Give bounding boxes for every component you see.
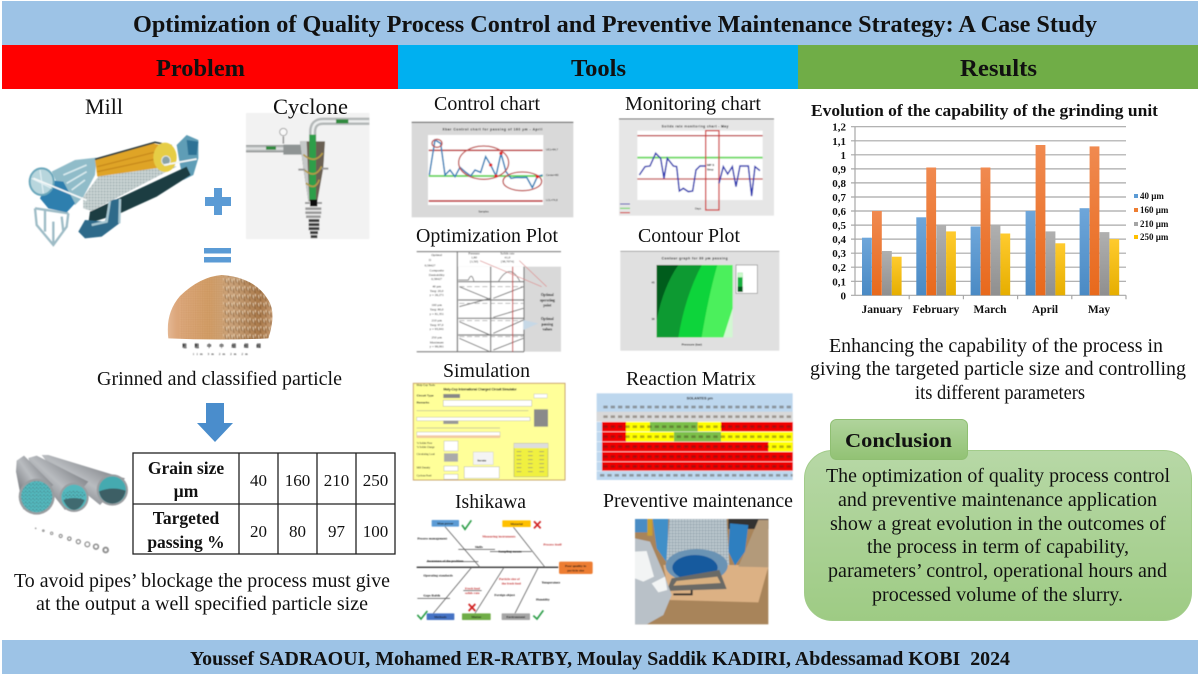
chart: ishikawa diagram: the fresh feed: [502, 581, 521, 585]
chart: optimization plot: Targ: 20,0: [430, 289, 444, 294]
chart: control chart: [412, 122, 573, 217]
x axis labels: May: [1088, 304, 1110, 316]
heading: control chart: Control chart: [434, 93, 540, 115]
text: problem statement: at the output a well specified particle size: [36, 593, 368, 615]
image: classified particles: [163, 273, 277, 356]
chart: optimization plot: [38,7074]: [501, 259, 514, 264]
table: grain size and targeted passing: µm: [174, 481, 199, 501]
table: grain size and targeted passing: Targeted: [153, 508, 219, 528]
table: grain size and targeted passing: 97: [328, 522, 346, 541]
bars: March: [971, 168, 1010, 295]
chart: ishikawa diagram: Process management: [417, 536, 448, 540]
image: simulation screenshot: Moly-Cop Tools: [417, 383, 436, 387]
legend: [1134, 191, 1169, 242]
heading: contour plot: Contour Plot: [638, 225, 740, 247]
bars: February: [916, 168, 956, 295]
y axis labels: [832, 122, 846, 302]
image: preventive maintenance photo: [635, 519, 768, 624]
chart: contour plot: Pressure (bar): [682, 342, 702, 346]
heading: Tools: Tools: [571, 56, 626, 82]
x axis labels: April: [1032, 304, 1058, 316]
chart: optimization plot: 41,0: [504, 255, 511, 260]
chart: optimization plot: 210 µm: [431, 319, 442, 323]
chart: monitoring chart: [619, 119, 774, 216]
legend: 40 µm: [1140, 191, 1164, 201]
chart: optimization plot: Targ: 97,0: [430, 323, 444, 328]
bars: May: [1080, 146, 1119, 295]
table: reaction matrix: SOLANTES µm: [687, 396, 714, 400]
y axis labels: 0,2: [832, 262, 846, 274]
table: grain size and targeted passing: 160: [285, 471, 310, 490]
chart: monitoring chart: MP S: [707, 163, 714, 167]
chart: ishikawa diagram: Matter: [471, 615, 482, 619]
chart: control chart: UCL=84,7: [546, 147, 559, 151]
chart: ishikawa diagram: Gaps Rabik: [423, 594, 440, 598]
chart: contour plot: 45: [651, 280, 655, 284]
image: classified particles: 11m 3m 2m 2m 2m: [193, 352, 248, 356]
chart: monitoring chart: Solids rate monitoring chart - May: [662, 124, 728, 128]
footer: authors: [2, 640, 1198, 674]
bars: April: [1026, 145, 1065, 295]
chart: optimization plot: y = 26,271: [429, 293, 444, 298]
heading: Tools: [398, 45, 798, 89]
table: grain size and targeted passing: 100: [363, 522, 388, 541]
icon: mill: [30, 135, 198, 245]
table: grain size and targeted passing: 210: [324, 471, 349, 490]
bars: January: [862, 211, 902, 295]
chart: optimization plot: Pressure: [468, 251, 480, 255]
image: classified particles: 粗 粗 中 中 细 细 细: [182, 342, 261, 349]
chart: capability bar chart: [811, 101, 1169, 316]
chart: monitoring chart: Stop: [707, 168, 714, 172]
heading: Problem: [2, 45, 398, 89]
text: problem statement: To avoid pipes’ blockage the process must give: [14, 570, 390, 592]
chart: ishikawa diagram: Temperature: [542, 580, 561, 584]
y axis labels: 0,7: [832, 192, 846, 204]
y axis labels: 0,5: [832, 220, 846, 232]
heading: reaction matrix: Reaction Matrix: [626, 368, 756, 390]
gridlines and axes: [851, 127, 1126, 299]
x axis labels: [862, 304, 1110, 316]
icon: equals sign: [204, 248, 231, 262]
chart: optimization plot: operating: [540, 298, 555, 302]
y axis labels: 1,1: [832, 136, 846, 148]
chart: optimization plot: Maximum: [430, 340, 444, 344]
image: simulation screenshot: Circuit Type: [417, 394, 434, 398]
heading: simulation: Simulation: [443, 360, 530, 382]
table: grain size and targeted passing: 250: [363, 471, 388, 490]
text: enhancing the capability: its different parameters: [915, 383, 1085, 404]
chart: optimization plot: y = 81,351: [429, 312, 444, 317]
chart: optimization plot: 0,58427: [431, 277, 442, 282]
chart: control chart: Samples: [478, 210, 489, 214]
table: grain size and targeted passing: 40: [250, 471, 267, 490]
chart: ishikawa diagram: solids rate: [465, 591, 480, 595]
table: grain size and targeted passing: [133, 453, 395, 554]
conclusion text: the process in term of capability,: [867, 537, 1129, 558]
chart: control chart: LCL=74,8: [546, 198, 558, 202]
heading: monitoring chart: Monitoring chart: [625, 93, 761, 115]
conclusion text: [826, 466, 1171, 606]
chart: optimization plot: Optimal: [431, 253, 442, 257]
chart: ishikawa diagram: Fresh feed: [465, 586, 480, 590]
x axis labels: January: [862, 304, 903, 316]
chart: optimization plot: y = 93,941: [429, 327, 444, 332]
y axis labels: 0,3: [832, 248, 846, 260]
chart title: Evolution of the capability of the grinding unit: [811, 101, 1159, 120]
y axis labels: 0,9: [832, 164, 846, 176]
panel: results: [804, 101, 1192, 620]
arrow: down: [197, 403, 233, 442]
chart: contour plot: Contour graph for 80 µm passing: [662, 257, 728, 261]
conclusion text: The optimization of quality process control: [826, 466, 1171, 487]
image: simulation screenshot: Circulating Load: [417, 453, 435, 456]
conclusion text: show a great evolution in the outcomes of: [830, 514, 1167, 535]
y axis labels: 0,8: [832, 178, 846, 190]
text: enhancing the capability: giving the targeted particle size and controlling: [810, 359, 1186, 380]
y axis labels: 0,4: [832, 234, 846, 246]
heading: ishikawa: Ishikawa: [455, 491, 526, 513]
image: simulation screenshot: Cyclone Feed: [417, 475, 432, 478]
icon: cyclone: [246, 113, 369, 239]
chart: optimization plot: Targ: 80,0: [430, 308, 444, 313]
chart: monitoring chart: Days: [695, 206, 702, 210]
icon: pipes: [16, 455, 128, 552]
table: reaction matrix: [597, 393, 793, 480]
image: simulation screenshot: Iterate: [477, 458, 487, 462]
text: enhancing the capability: [810, 336, 1186, 404]
y axis labels: 1,2: [832, 122, 846, 134]
chart: ishikawa diagram: Particle size of: [499, 577, 521, 581]
heading: Results: [798, 45, 1198, 89]
heading: Results: Results: [960, 56, 1037, 82]
text: enhancing the capability: Enhancing the capability of the process in: [829, 336, 1163, 357]
chart: ishikawa diagram: Man power: [437, 522, 454, 526]
legend: 210 µm: [1140, 219, 1169, 229]
table: grain size and targeted passing: 20: [250, 522, 267, 541]
chart: control chart: Center=80: [546, 173, 559, 177]
chart: ishikawa diagram: Measuring instruments: [482, 534, 516, 538]
chart: ishikawa diagram: Operating standards: [423, 574, 454, 578]
chart: control chart: Xbar Control chart for passing of 160 µm - April: [442, 127, 542, 131]
image: simulation screenshot: Mill Density: [417, 466, 431, 469]
caption: grinned and classified particle: Grinned and classified particle: [97, 368, 342, 390]
chart: optimization plot: 0,58427: [425, 264, 436, 269]
y axis labels: 0: [840, 290, 846, 302]
title banner: [2, 1, 1198, 45]
table: grain size and targeted passing: 80: [289, 522, 306, 541]
callout: conclusion: [804, 420, 1192, 620]
chart: ishikawa diagram: Environment: [506, 615, 526, 619]
panel: problem: [14, 94, 395, 615]
text: problem statement: [14, 570, 390, 615]
footer: authors: Youssef SADRAOUI, Mohamed ER-RATBY, Moulay Saddik KADIRI, Abdessamad KOBI 2024: [190, 649, 1010, 670]
x axis labels: February: [913, 304, 960, 316]
chart: optimization plot: Optimal: [541, 317, 554, 321]
heading: preventive maintenance: Preventive maintenance: [603, 490, 793, 512]
chart: optimization plot: [417, 251, 561, 352]
chart: ishikawa diagram: Humidity: [536, 598, 550, 602]
conclusion text: processed volume of the slurry.: [872, 585, 1123, 606]
chart: optimization plot: 40 µm: [432, 284, 441, 288]
chart: ishikawa diagram: Methods: [434, 615, 447, 619]
chart: optimization plot: y = 99,061: [429, 344, 444, 349]
heading: Problem: Problem: [156, 56, 245, 82]
conclusion text: parameters’ control, operational hours and: [828, 561, 1167, 582]
chart: optimization plot: 1,80: [471, 255, 477, 260]
chart: ishikawa diagram: Awareness of the problem: [427, 559, 464, 563]
chart: ishikawa diagram: Foreign object: [494, 593, 516, 597]
label: Cyclone: Cyclone: [273, 94, 348, 119]
image: simulation screenshot: Moly-Cop International Charged Circuit Simulator: [443, 388, 517, 392]
legend: 250 µm: [1140, 232, 1169, 242]
heading: optimization plot: Optimization Plot: [416, 225, 558, 247]
chart: optimization plot: Optimal: [541, 293, 554, 297]
chart: ishikawa diagram: Poor quality in: [565, 564, 586, 568]
table: grain size and targeted passing: Grain size: [148, 458, 224, 478]
conclusion text: and preventive maintenance application: [838, 490, 1157, 511]
chart: contour plot: [620, 251, 779, 351]
table: grain size and targeted passing: passing %: [147, 532, 225, 552]
image: simulation screenshot: % Solids Charge: [417, 446, 435, 449]
conclusion tab: [830, 420, 968, 460]
y axis labels: 0,1: [832, 276, 846, 288]
chart: contour plot: 38: [651, 317, 655, 321]
chart: optimization plot: D: [429, 258, 432, 262]
chart: ishikawa diagram: Material: [510, 522, 523, 526]
chart: optimization plot: 250 µm: [431, 335, 442, 339]
panel: tools: [412, 93, 793, 624]
chart: optimization plot: Solids rate: [500, 251, 515, 255]
image: simulation screenshot: [413, 383, 565, 480]
chart: ishikawa diagram: Skills: [475, 545, 483, 549]
y axis labels: 0,6: [832, 206, 846, 218]
icon: plus sign: [205, 188, 231, 215]
conclusion tab: Conclusion: [845, 430, 952, 452]
chart: ishikawa diagram: particle size: [567, 568, 585, 572]
chart: optimization plot: [1,50]: [470, 259, 478, 264]
title banner: Optimization of Quality Process Control and Preventive Maintenance Strategy: A Case Study: [133, 12, 1097, 38]
label: Mill: Mill: [85, 94, 123, 119]
chart: optimization plot: Composite: [429, 269, 444, 273]
chart: optimization plot: passing: [542, 322, 553, 326]
legend: 160 µm: [1140, 205, 1169, 215]
chart: optimization plot: values: [542, 328, 553, 332]
chart: ishikawa diagram: Sampling means: [498, 550, 522, 554]
y axis labels: 1: [840, 150, 846, 162]
image: simulation screenshot: Remarks: [417, 400, 430, 404]
chart: optimization plot: Desirability: [429, 273, 445, 277]
chart: optimization plot: 160 µm: [431, 303, 442, 307]
chart: ishikawa diagram: Process itself: [543, 542, 563, 546]
chart: optimization plot: point: [543, 304, 552, 308]
image: simulation screenshot: % Solids Flow: [417, 442, 432, 445]
x axis labels: March: [973, 304, 1007, 316]
chart: ishikawa diagram: [417, 520, 593, 620]
